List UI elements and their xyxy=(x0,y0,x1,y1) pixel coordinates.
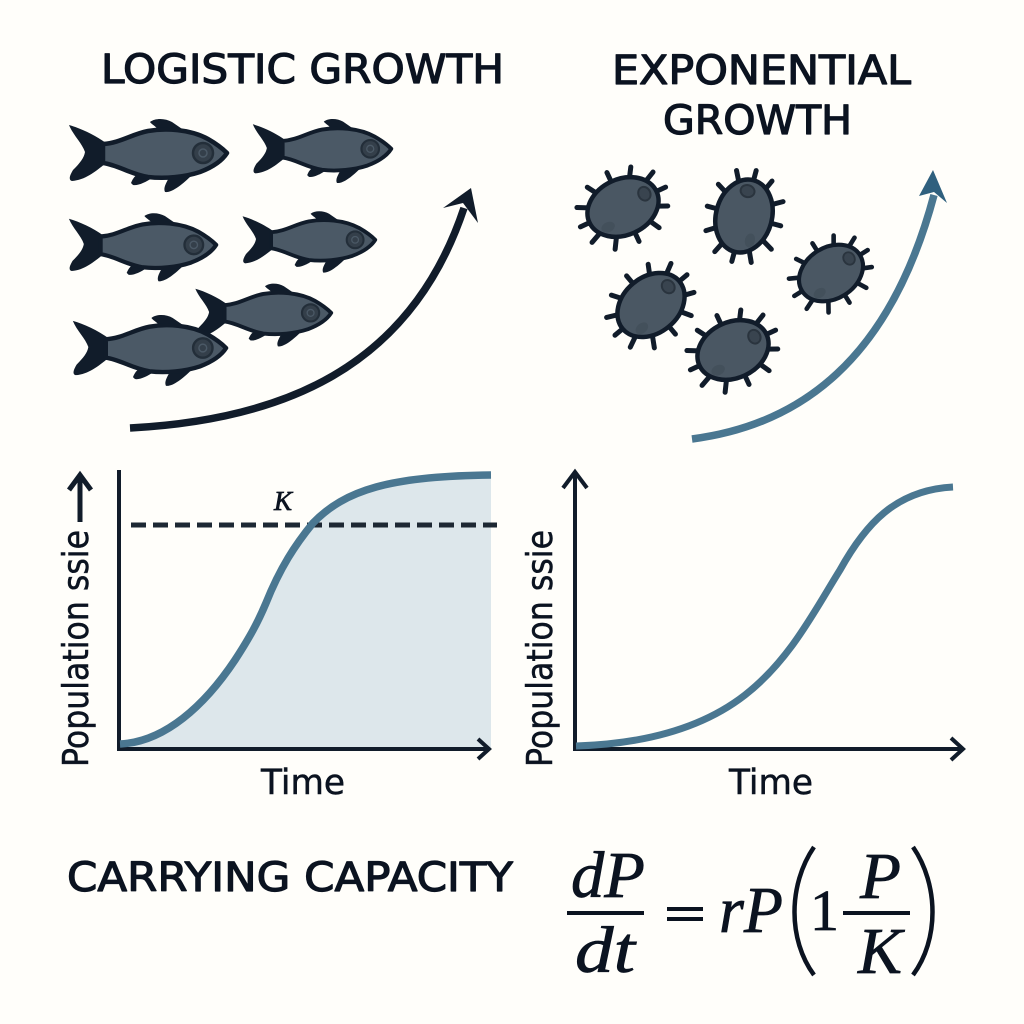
carrying capacity dashed line xyxy=(131,522,497,528)
title: exponential growth xyxy=(612,48,912,144)
formula: logistic growth equation: rP xyxy=(719,874,783,947)
y axis label: Population ssie xyxy=(520,530,561,767)
formula: logistic growth equation: K xyxy=(857,915,905,988)
K label: K xyxy=(273,486,294,516)
shaded area under curve xyxy=(120,475,491,748)
arrow: exponential growth trend xyxy=(692,170,947,439)
formula: logistic growth equation: P xyxy=(859,840,901,913)
chart: logistic curve with carrying capacity xyxy=(56,470,497,803)
growth curve xyxy=(576,487,953,746)
y axis label: Population ssie xyxy=(56,530,97,767)
logistic curve xyxy=(120,475,491,744)
chart: exponential curve xyxy=(520,472,963,803)
icon: bacteria cluster xyxy=(564,153,886,404)
x axis label: Time xyxy=(260,763,345,803)
heading: carrying capacity: CARRYING CAPACITY xyxy=(67,855,514,901)
arrow: logistic growth trend xyxy=(130,188,478,428)
formula: logistic growth equation: 1 xyxy=(810,878,839,943)
formula: logistic growth equation: dt xyxy=(575,914,637,987)
title: exponential growth: GROWTH xyxy=(663,98,852,144)
title: exponential growth: EXPONENTIAL xyxy=(612,48,912,94)
formula: logistic growth equation xyxy=(567,839,932,988)
formula: logistic growth equation: dP xyxy=(571,839,645,912)
title: logistic growth: LOGISTIC GROWTH xyxy=(101,47,504,93)
axes xyxy=(563,472,963,760)
axes xyxy=(119,470,489,759)
x axis label: Time xyxy=(728,763,813,803)
y axis arrow xyxy=(69,475,91,522)
icon: school of fish xyxy=(69,119,391,386)
